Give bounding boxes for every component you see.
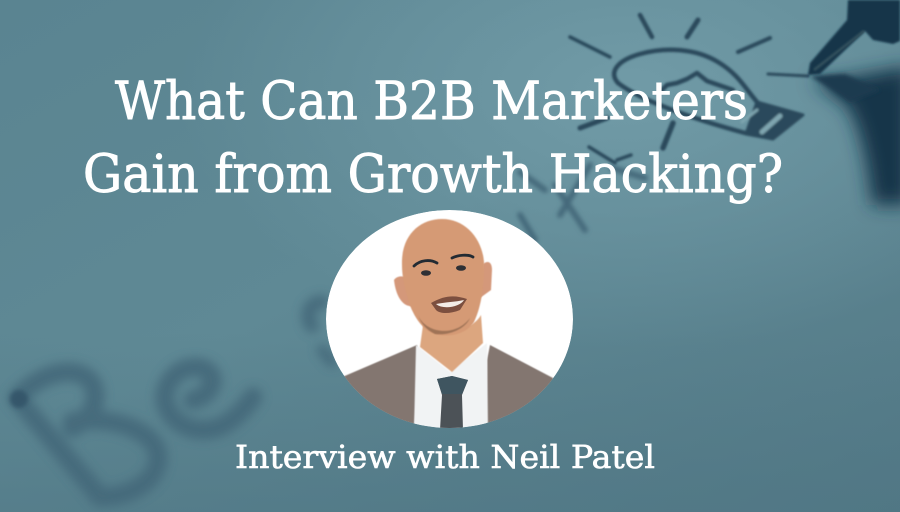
portrait: Neil Patel in a white circle (326, 210, 573, 430)
teeth (436, 300, 464, 307)
beard shadow (419, 318, 470, 335)
title (83, 72, 783, 205)
title line 1: What Can B2B Marketers (115, 72, 748, 132)
head (402, 219, 484, 335)
title line 2: Gain from Growth Hacking? (83, 145, 783, 205)
moustache and mouth (431, 296, 467, 313)
icon: blurred pen and its shadow (808, 0, 900, 205)
tie (437, 376, 468, 430)
subtitle: Interview with Neil Patel (235, 438, 655, 476)
icon: hand-drawn light bulb (570, 15, 808, 163)
suit jacket (344, 344, 554, 424)
blurred handwritten word "Be" (17, 302, 332, 497)
dark ink blot at start of the letter B (10, 390, 28, 408)
eyes (421, 270, 431, 276)
white circle (326, 210, 573, 428)
shirt (414, 343, 488, 430)
ears (394, 262, 492, 306)
eyebrows (414, 255, 473, 266)
neck (420, 315, 483, 372)
blurred handwriting strokes behind the title (520, 165, 645, 240)
